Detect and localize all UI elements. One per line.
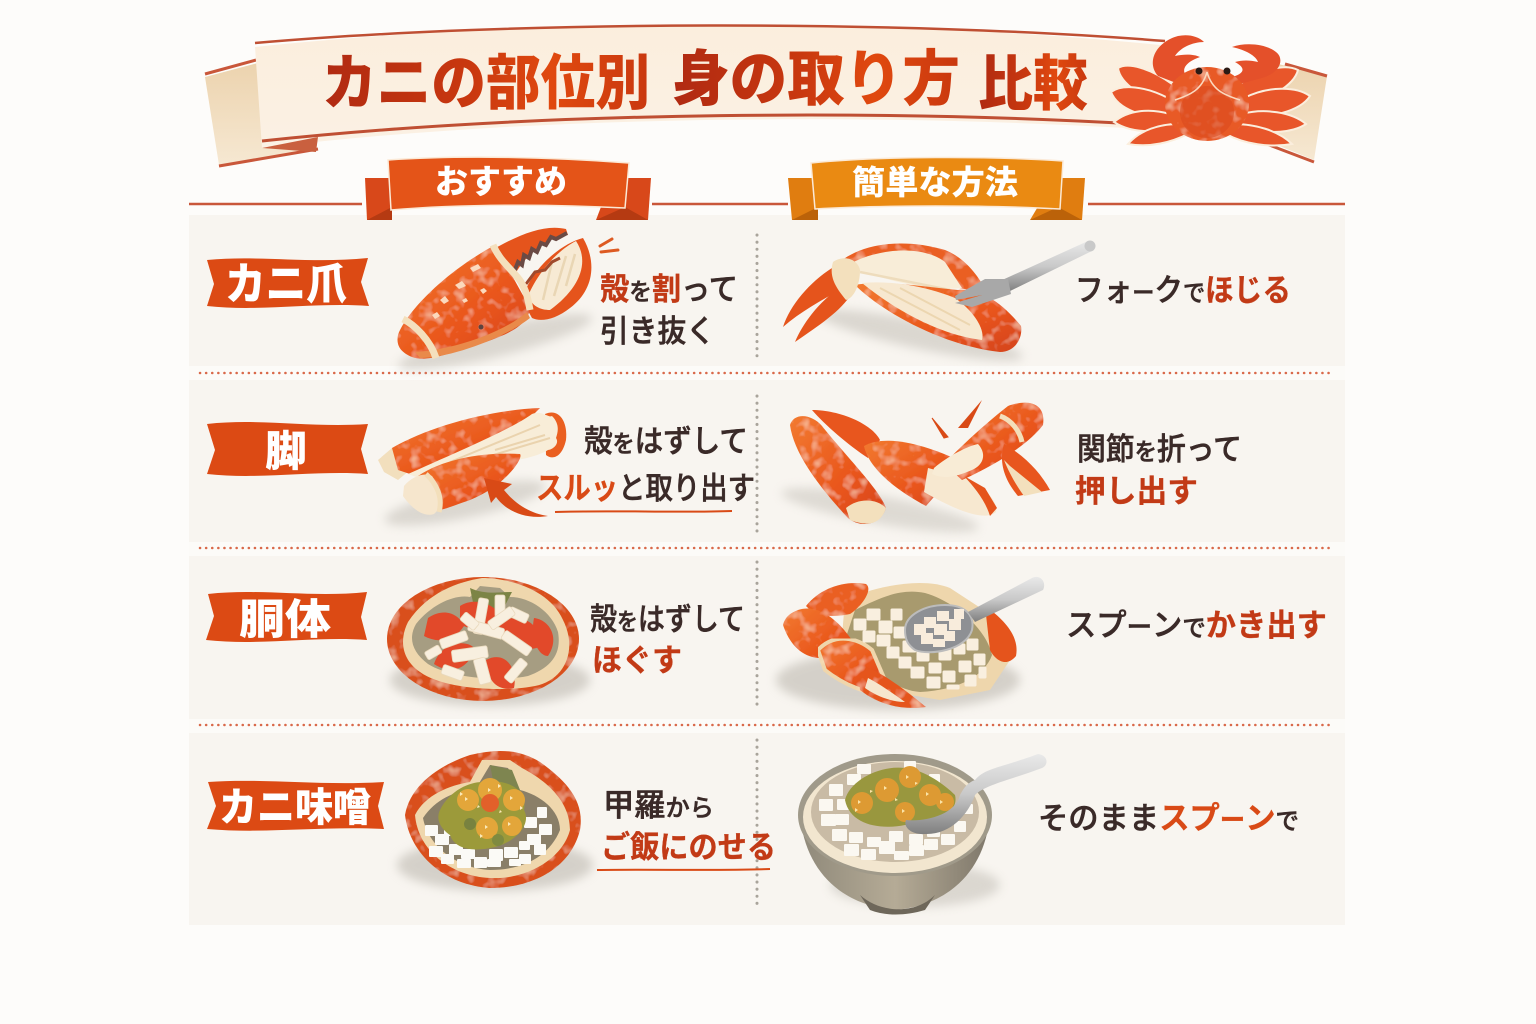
text: from shell onto rice (597, 788, 776, 870)
column header: easy method (788, 157, 1085, 220)
text: crack shell and pull out: 引き抜く (600, 314, 715, 349)
text: remove shell and slide out (536, 424, 755, 512)
illustration: snapped leg joint (779, 400, 1050, 541)
text: remove shell and slide out: 殻をはずして (584, 424, 748, 459)
text: from shell onto rice: ご飯にのせる (601, 830, 776, 865)
right ribbon tail (1240, 62, 1327, 162)
icon: red crab (1111, 35, 1310, 146)
column header: easy method: 簡単な方法 (852, 164, 1018, 201)
label: カニ爪: カニ爪 (225, 260, 347, 309)
label: 胴体: 胴体 (239, 596, 331, 643)
column header: recommended (189, 157, 1345, 220)
illustration: opened claw with fork (783, 240, 1096, 371)
text: just with a spoon: そのままスプーンで (1038, 801, 1299, 836)
title text (322, 46, 1088, 118)
label: 脚 (207, 422, 368, 476)
label: 脚: 脚 (265, 428, 307, 475)
text: remove shell and flake: 殻をはずして (590, 602, 745, 637)
row 2: legs (207, 400, 1242, 541)
text: snap joint and push out (1075, 432, 1242, 509)
text: from shell onto rice: 甲羅から (603, 788, 714, 823)
text: remove shell and slide out: スルッと取り出す (536, 471, 755, 506)
text: scoop with spoon: スプーンでかき出す (1066, 608, 1327, 643)
text: snap joint and push out: 押し出す (1075, 474, 1198, 509)
text: snap joint and push out: 関節を折って (1077, 432, 1242, 467)
row 3: body (206, 577, 1327, 710)
text: pick with fork: フォークでほじる (1075, 273, 1291, 308)
title text: 比較 (978, 51, 1088, 118)
title text: 身の取り方 (672, 46, 960, 113)
illustration: shell with miso on rice (397, 751, 593, 891)
text: remove shell and flake: ほぐす (592, 643, 682, 678)
text: remove shell and flake (590, 602, 745, 678)
text: crack shell and pull out: 殻を割って (600, 272, 738, 307)
illustration: opened shell with picked body meat (387, 577, 590, 706)
label: カニ味噌: カニ味噌 (219, 786, 371, 830)
row 4: crab miso (207, 751, 1299, 914)
column header: recommended: おすすめ (435, 163, 567, 200)
illustration: shell with spoon (776, 577, 1044, 710)
text: crack shell and pull out (600, 272, 738, 349)
title banner (205, 25, 1327, 166)
illustration: shelled leg (378, 408, 566, 535)
arrow: slide out (484, 478, 548, 517)
left ribbon tail (205, 60, 318, 166)
row 1: crab claw (207, 228, 1291, 381)
banner body (255, 25, 1190, 148)
illustration: whole claw (394, 228, 618, 381)
label: 胴体 (206, 592, 367, 643)
illustration: rice bowl with spoon (798, 754, 1047, 914)
panel: comparison table background (189, 215, 1345, 925)
title text: カニの部位別 (322, 50, 650, 117)
